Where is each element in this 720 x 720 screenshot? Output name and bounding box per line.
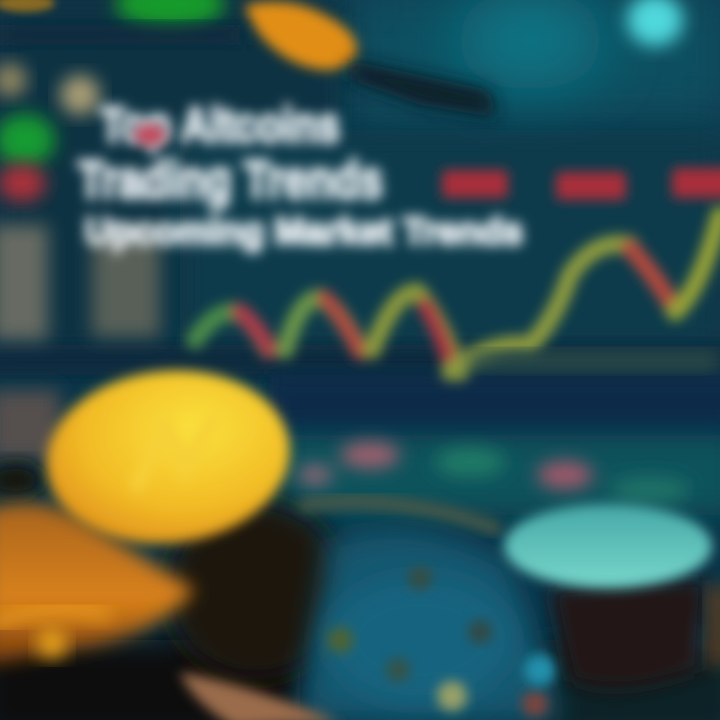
line chart bbox=[195, 215, 720, 372]
title: Trading Trends bbox=[78, 150, 383, 210]
top decorations bbox=[0, 0, 498, 118]
magnifying glass bbox=[300, 502, 720, 688]
icon: gold coin pile bbox=[0, 503, 195, 665]
title: Upcoming Market Trends bbox=[85, 211, 523, 253]
left candlestick column bbox=[0, 63, 160, 340]
panel: blue board bbox=[300, 529, 700, 720]
title bbox=[78, 97, 523, 253]
red dashes bbox=[442, 168, 720, 200]
title accent bbox=[134, 124, 166, 146]
title: Top Altcoins bbox=[100, 97, 340, 153]
horizon strip bbox=[470, 352, 720, 370]
wooden handle bbox=[180, 672, 340, 720]
dark foreground bbox=[0, 462, 345, 680]
glow: moon bbox=[455, 0, 683, 90]
icon: gold coin bbox=[38, 359, 298, 555]
chart markers strip bbox=[297, 442, 690, 502]
lower-left band bbox=[0, 390, 60, 460]
